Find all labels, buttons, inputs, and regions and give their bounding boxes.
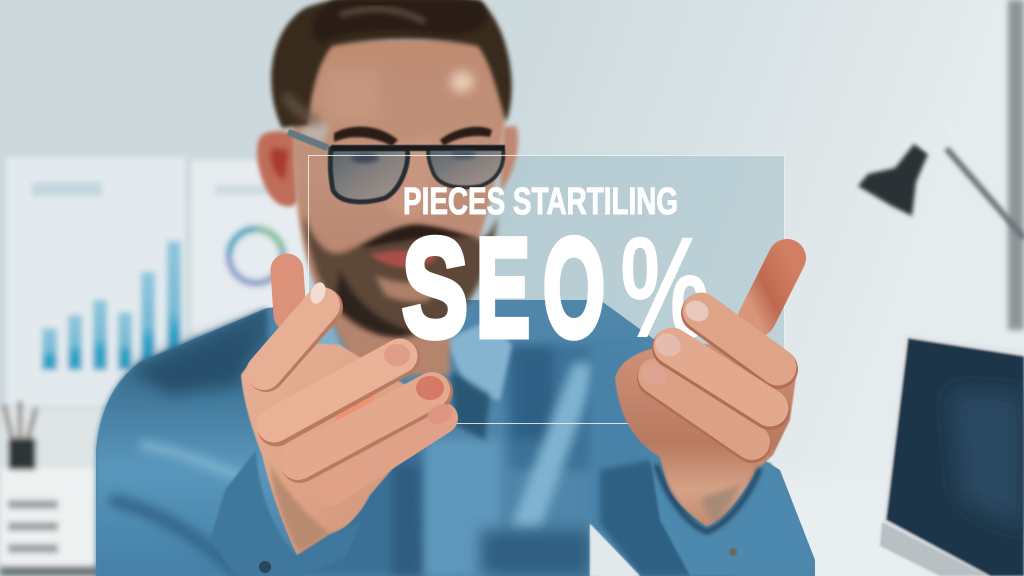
man: shirt [96,300,815,576]
panel subtitle: PIECES STARTILING [403,181,678,223]
nails [308,280,328,306]
panel headline SEO: E [476,209,530,366]
ears [257,131,298,206]
panel headline SEO [402,209,605,366]
index finger [266,307,324,373]
palm and wrist [615,340,797,527]
little finger [330,418,442,490]
hair [271,0,512,128]
desk lamp [858,120,1024,238]
glasses [288,132,505,202]
eyebrows [334,127,398,146]
middle finger [276,358,402,428]
panel percent sign: % [620,207,710,368]
poster: bar chart [6,157,186,407]
index finger [701,313,778,369]
thumb [757,258,787,318]
shirt cuffs [210,450,812,576]
beard [303,215,498,336]
middle finger [672,348,770,410]
right hand [615,258,797,527]
back thumb [287,270,290,315]
ring finger [300,392,434,464]
shelf and pen cup [0,402,106,576]
computer monitor [880,334,1024,576]
glass panel border and text [308,156,784,424]
ring finger [656,378,752,444]
glass panel tint on the wall behind the man [308,155,785,424]
poster: ring chart [191,160,311,335]
panel headline SEO: O [543,209,605,366]
palm and wrist [241,344,430,555]
left hand [241,270,456,555]
man: head and face [257,0,518,336]
nails [682,297,712,325]
gap shadow [355,418,415,452]
orange palm glow [335,385,375,425]
panel headline SEO: S [402,209,468,366]
man: neck [325,310,450,375]
